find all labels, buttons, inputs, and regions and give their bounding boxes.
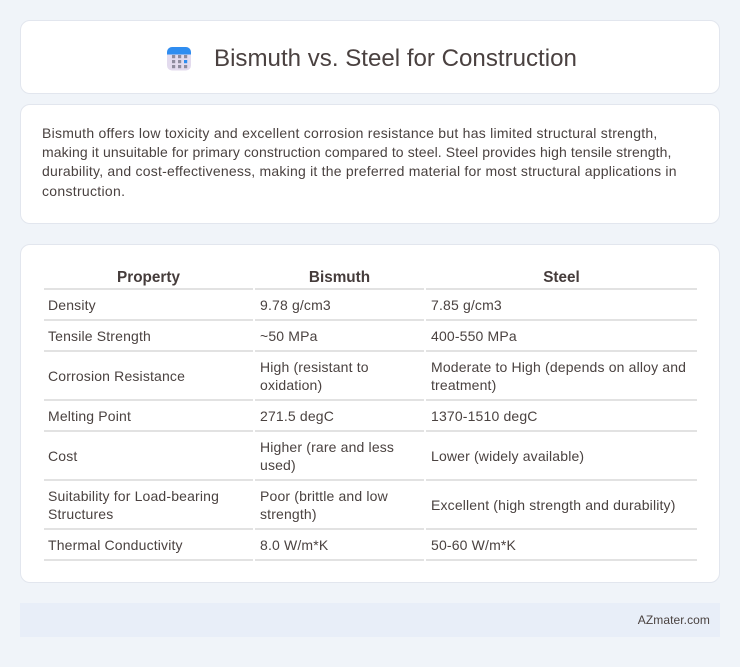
summary text: making it unsuitable for primary construction compared to steel. Steel provides high tensile strength, [42,144,672,160]
row: Cost: used) [260,457,296,473]
icon: calendar [167,47,191,70]
row: Melting Point: Melting Point [48,408,131,424]
row: Melting Point [48,408,538,424]
row: Density: 9.78 g/cm3 [260,297,331,313]
row: Suitability: strength) [260,506,317,522]
header: Bismuth: Bismuth [309,269,370,286]
summary text: construction. [42,183,125,199]
row: Density [48,297,502,313]
row: Thermal Conductivity: 50-60 W/m*K [431,537,516,553]
panel: summary [20,104,720,224]
header: Steel: Steel [543,269,580,286]
summary text [42,125,677,199]
row: Suitability: Suitability for Load-bearing [48,488,219,504]
row: Corrosion Resistance [48,359,686,393]
row: Cost: Cost [48,448,77,464]
row: Cost: Higher (rare and less [260,439,394,455]
panel: comparison table [20,244,720,583]
panel: title card [20,20,720,94]
row: Tensile Strength: ~50 MPa [260,328,318,344]
row: Thermal Conductivity [48,537,516,553]
row: Tensile Strength [48,328,517,344]
row: Melting Point: 271.5 degC [260,408,334,424]
footer bar [20,603,720,637]
row: Cost: Lower (widely available) [431,448,584,464]
header: Property: Property [117,269,180,286]
footer text: AZmater.com [638,613,710,627]
row: Cost [48,439,584,473]
row: Thermal Conductivity: Thermal Conductivity [48,537,183,553]
row: Thermal Conductivity: 8.0 W/m*K [260,537,328,553]
row: Density: 7.85 g/cm3 [431,297,502,313]
row: Suitability: Poor (brittle and low [260,488,388,504]
row: Density: Density [48,297,96,313]
row: Corrosion Resistance: oxidation) [260,377,322,393]
row: Tensile Strength: 400-550 MPa [431,328,517,344]
title: Bismuth vs. Steel for Construction [214,45,577,72]
row: Corrosion Resistance: Moderate to High (depends on alloy and [431,359,686,375]
row: Corrosion Resistance: treatment) [431,377,496,393]
row: Suitability [48,488,676,522]
row: Melting Point: 1370-1510 degC [431,408,538,424]
row: Tensile Strength: Tensile Strength [48,328,151,344]
summary text: durability, and cost-effectiveness, making it the preferred material for most structural applications in [42,163,677,179]
summary text: Bismuth offers low toxicity and excellent corrosion resistance but has limited structural strength, [42,125,658,141]
row: Corrosion Resistance: Corrosion Resistance [48,368,185,384]
row: Corrosion Resistance: High (resistant to [260,359,369,375]
row: Suitability: Excellent (high strength and durability) [431,497,676,513]
row: Suitability: Structures [48,506,113,522]
